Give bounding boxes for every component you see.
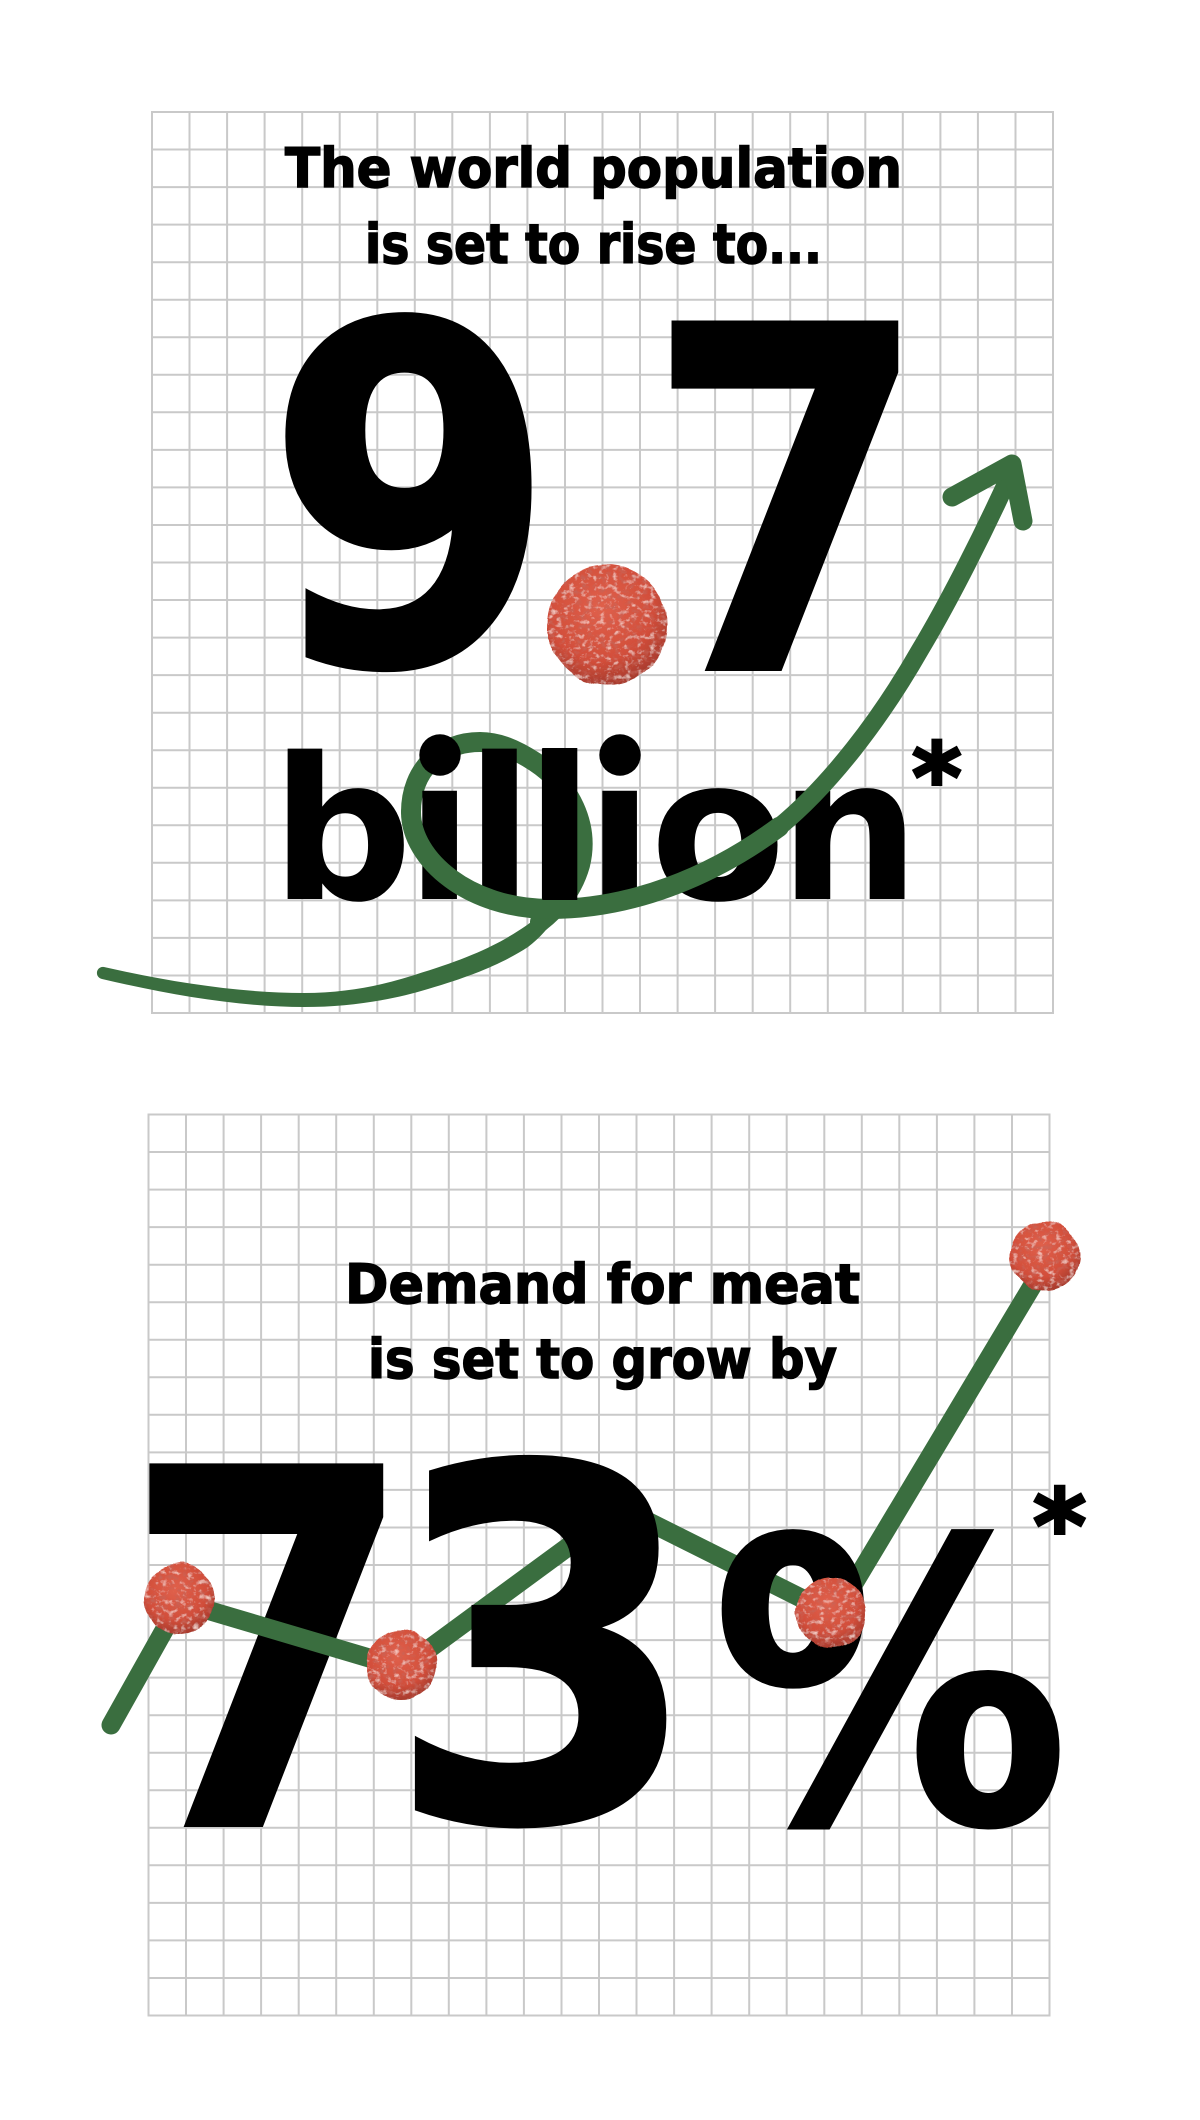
icon: meatball marker 3 <box>796 1578 866 1648</box>
panel: world population <box>97 112 1053 1013</box>
panel: demand for meat <box>111 1114 1086 2016</box>
asterisk: * <box>912 724 962 834</box>
icon: meatball marker 4 <box>1010 1221 1080 1291</box>
big number 9: 9 <box>266 227 556 774</box>
line chart: rising demand <box>111 1258 1049 1725</box>
heading: the world population is set to rise to: is set to rise to... <box>365 213 822 276</box>
heading: demand for meat is set to grow by: Demand for meat <box>345 1253 860 1316</box>
word: billion: billion <box>271 715 920 946</box>
heading: demand for meat is set to grow by <box>345 1253 860 1391</box>
heading: demand for meat is set to grow by: is set to grow by <box>368 1328 837 1391</box>
arrow: rising curve in front of the word <box>97 464 1023 1007</box>
second letter l stem above the arrow <box>542 748 577 900</box>
icon: meatball marker 2 <box>366 1630 436 1700</box>
big number 7: 7 <box>122 1366 416 1943</box>
grid background <box>152 112 1053 1013</box>
heading: the world population is set to rise to <box>285 137 902 276</box>
icon: meatball decimal point <box>547 565 667 685</box>
arrow: back of the loop, behind the word <box>411 742 583 922</box>
big number 7: 7 <box>645 226 930 783</box>
icon: meatball marker 1 <box>144 1564 214 1634</box>
i dot 1 <box>419 734 461 776</box>
big number 3: 3 <box>386 1365 701 1936</box>
percent sign: % <box>712 1459 1069 1915</box>
asterisk: * <box>1033 1468 1086 1587</box>
heading: the world population is set to rise to: The world population <box>285 137 902 200</box>
i dot 2 <box>599 734 641 776</box>
grid background <box>148 1114 1050 2016</box>
